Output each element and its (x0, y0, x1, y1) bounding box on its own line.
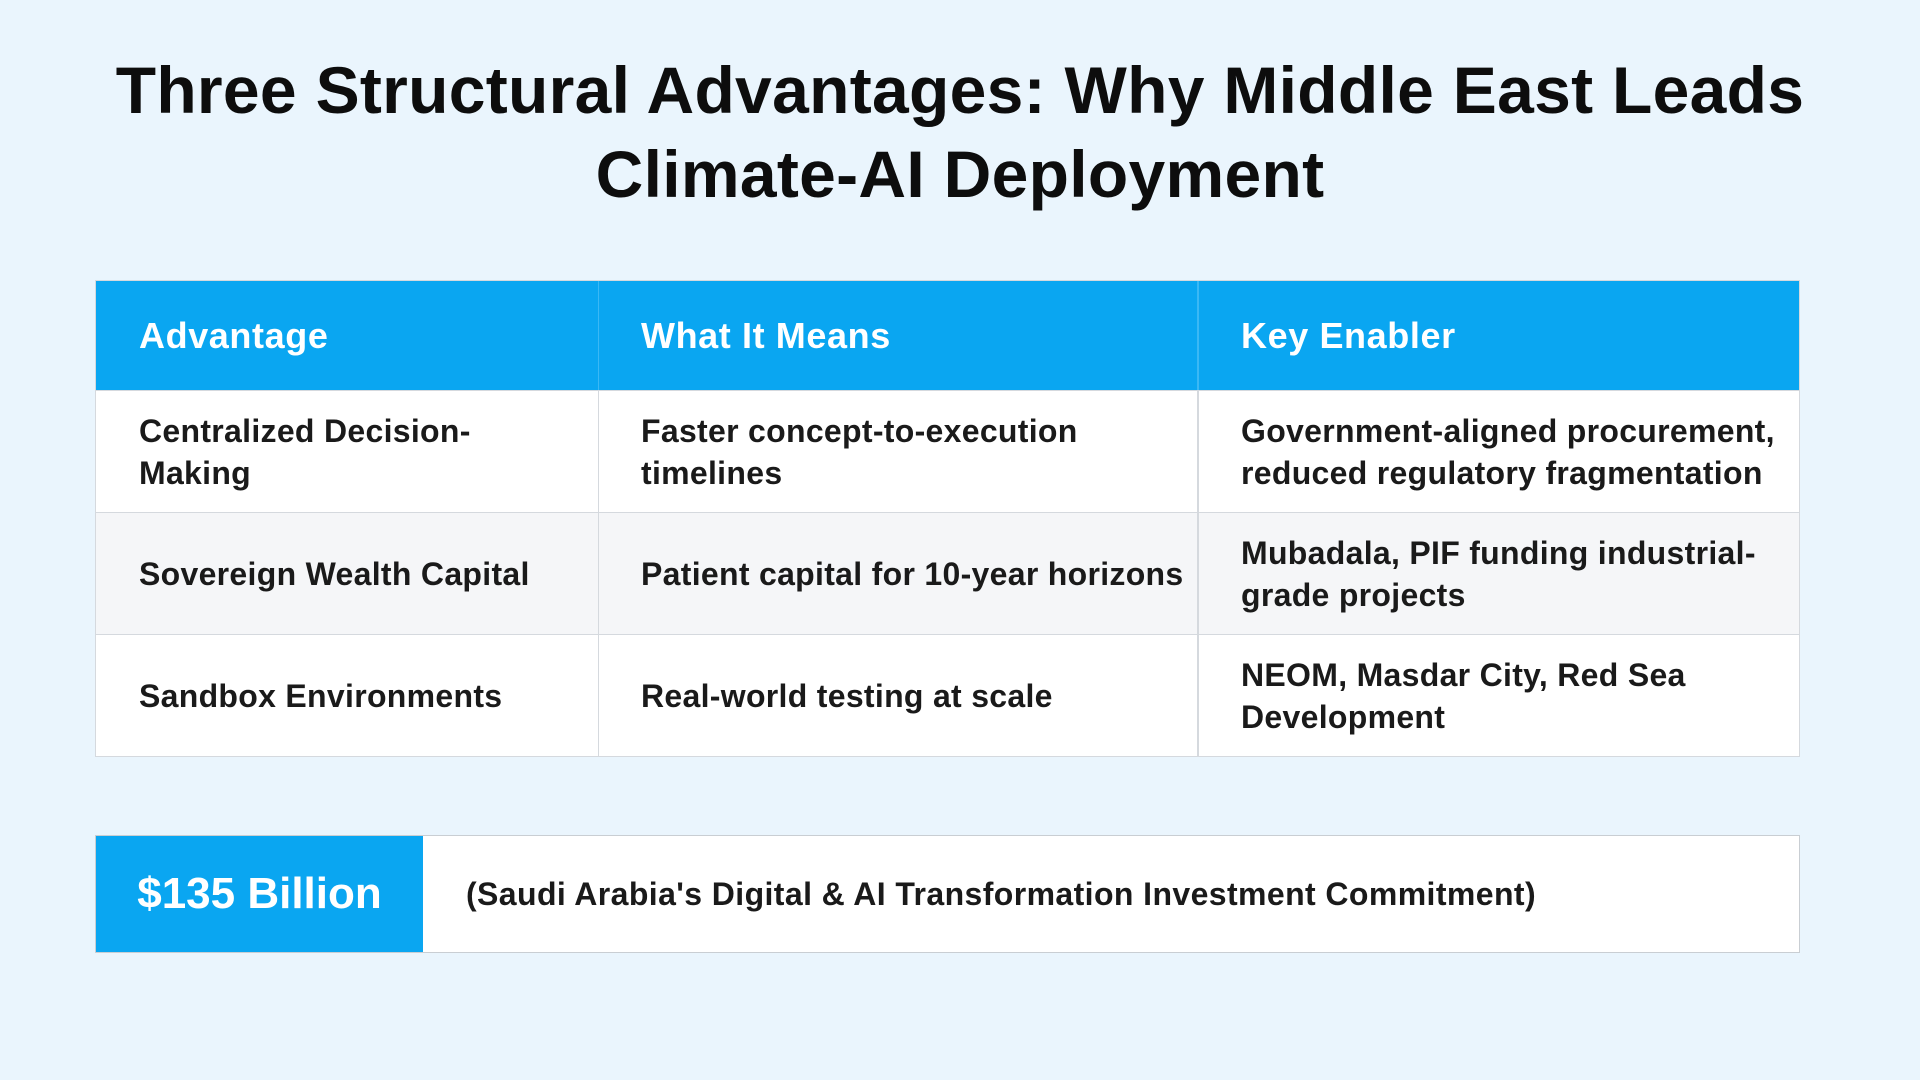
row: centralized decision-making: Faster concept-to-execution (641, 412, 1078, 448)
row: sovereign wealth capital: Mubadala, PIF funding industrial- (1241, 534, 1756, 570)
title (116, 53, 1804, 211)
row: sandbox environments: Development (1241, 698, 1445, 734)
row: sandbox environments: Real-world testing at scale (641, 678, 1053, 714)
table header (96, 281, 1799, 390)
table: advantages (95, 280, 1800, 757)
row: centralized decision-making: reduced regulatory fragmentation (1241, 454, 1763, 490)
row: sovereign wealth capital (96, 512, 1799, 634)
row: sandbox environments: Sandbox Environments (139, 678, 502, 714)
row: sandbox environments: NEOM, Masdar City, Red Sea (1241, 656, 1686, 692)
row: sovereign wealth capital: grade projects (1241, 576, 1466, 612)
table header: What It Means (641, 314, 891, 356)
stat value: $135 Billion (137, 869, 382, 918)
row: centralized decision-making: timelines (641, 454, 782, 490)
row: centralized decision-making: Government-aligned procurement, (1241, 412, 1775, 448)
row: centralized decision-making: Centralized Decision- (139, 412, 471, 448)
row: sovereign wealth capital: Sovereign Wealth Capital (139, 556, 530, 592)
row: centralized decision-making: Making (139, 454, 251, 490)
table header: Advantage (139, 314, 328, 356)
title: Climate-AI Deployment (596, 137, 1324, 211)
row: centralized decision-making (96, 390, 1799, 512)
row: sandbox environments (96, 634, 1799, 756)
stat value (96, 836, 423, 952)
table header: Key Enabler (1241, 314, 1456, 356)
callout: investment (95, 835, 1800, 953)
stat description: (Saudi Arabia's Digital & AI Transformation Investment Commitment) (466, 876, 1536, 912)
title: Three Structural Advantages: Why Middle East Leads (116, 53, 1804, 127)
row: sovereign wealth capital: Patient capital for 10-year horizons (641, 556, 1184, 592)
